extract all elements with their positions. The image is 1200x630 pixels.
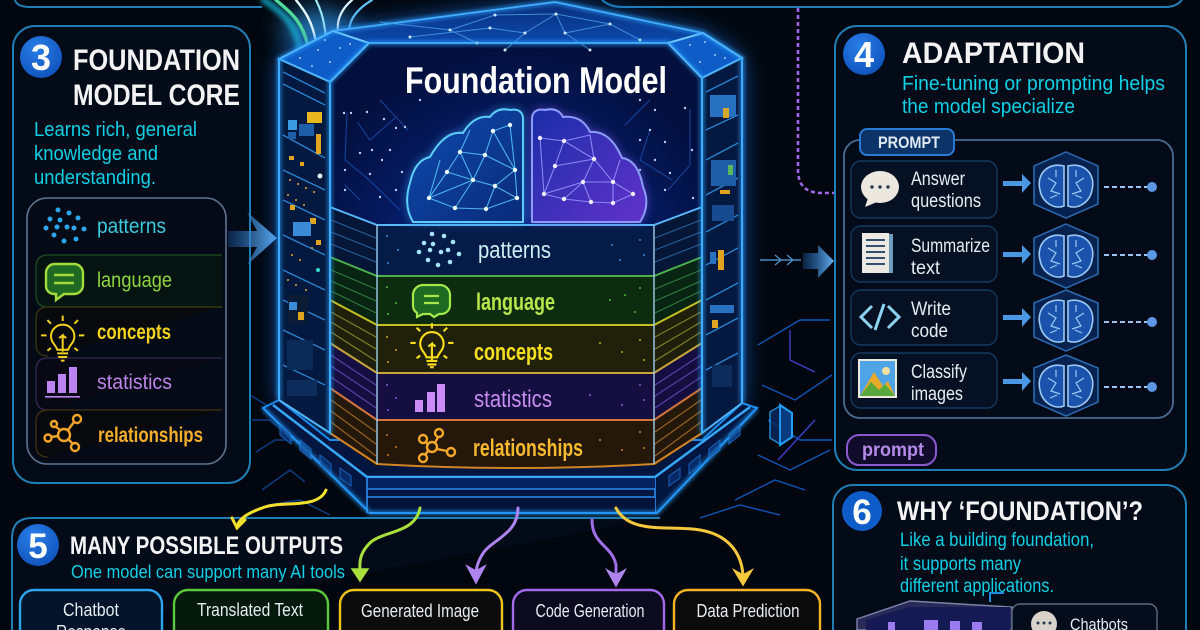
knowledge list bbox=[27, 198, 226, 464]
label: statistics: statistics bbox=[97, 371, 172, 394]
roof bbox=[333, 2, 703, 50]
description bbox=[900, 530, 1094, 597]
icon: network bbox=[44, 415, 81, 451]
left hemisphere bbox=[407, 109, 523, 222]
description: the model specialize bbox=[902, 96, 1075, 118]
icon: document bbox=[862, 233, 893, 273]
description: knowledge and bbox=[34, 143, 158, 165]
neural network lines bbox=[429, 125, 517, 209]
card: data prediction bbox=[674, 590, 820, 630]
specialized model hexagon 1 bbox=[1034, 152, 1098, 218]
icon: code bbox=[861, 304, 899, 330]
description: Like a building foundation, bbox=[900, 530, 1094, 551]
panel 4: adaptation bbox=[835, 26, 1186, 470]
description: different applications. bbox=[900, 576, 1054, 597]
card: chatbot response: Chatbot bbox=[63, 600, 119, 620]
arrow: purple right bbox=[592, 520, 625, 586]
small arrows bbox=[1003, 174, 1031, 391]
layer: language bbox=[413, 285, 555, 317]
glowing circuit chip bbox=[770, 405, 792, 445]
description: Fine-tuning or prompting helps bbox=[902, 73, 1165, 95]
badge 6 bbox=[842, 491, 882, 532]
purple dotted connector bbox=[798, 8, 843, 193]
arrow: list to core bbox=[228, 212, 277, 265]
layer: relationships bbox=[419, 429, 583, 462]
description: it supports many bbox=[900, 554, 1021, 575]
layer: statistics: statistics bbox=[474, 386, 552, 413]
heading: FOUNDATION bbox=[73, 44, 240, 77]
icon: chat bbox=[861, 171, 899, 207]
top-right panel edge bbox=[602, 0, 1182, 7]
circuit traces around the building bbox=[250, 320, 832, 518]
data streams entering the tower bbox=[264, 0, 372, 50]
panel 5: many possible outputs bbox=[12, 518, 820, 630]
card: data prediction: Data Prediction bbox=[696, 601, 800, 621]
card: translated text: Translated Text bbox=[197, 600, 303, 620]
row: write code bbox=[851, 290, 997, 345]
left tower bbox=[279, 31, 369, 433]
badge 5 bbox=[17, 524, 59, 566]
panel 3: foundation model core bbox=[13, 26, 250, 483]
icon: speech bubble bbox=[46, 264, 83, 300]
layer: relationships: relationships bbox=[473, 435, 583, 462]
applications box bbox=[1012, 604, 1157, 630]
layer: concepts bbox=[410, 323, 553, 367]
title: foundation model: Foundation Model bbox=[405, 60, 667, 101]
badge 4 bbox=[843, 33, 885, 75]
description: Learns rich, general bbox=[34, 119, 197, 141]
label: relationships: relationships bbox=[98, 424, 203, 447]
badge 4: 4 bbox=[854, 34, 874, 75]
foundation model building bbox=[263, 2, 757, 513]
specialized model hexagon 2 bbox=[1034, 224, 1098, 288]
row: answer questions: Answer bbox=[911, 169, 966, 190]
label: language: language bbox=[97, 269, 172, 292]
icon: bar chart bbox=[45, 367, 80, 398]
badge 5: 5 bbox=[28, 527, 48, 566]
badge 3: 3 bbox=[31, 37, 51, 78]
side strips and layers bbox=[330, 207, 702, 468]
row: classify images bbox=[851, 353, 997, 408]
card: code generation bbox=[513, 590, 664, 630]
building edge glow bbox=[263, 2, 757, 513]
row: write code: code bbox=[911, 321, 948, 342]
label: patterns: patterns bbox=[97, 215, 166, 238]
prompt pill bbox=[847, 435, 936, 465]
base plinth bbox=[263, 400, 757, 513]
top-left panel edge bbox=[15, 0, 262, 7]
row: answer questions bbox=[851, 161, 997, 218]
card: translated text bbox=[174, 590, 328, 630]
prompt tag bbox=[860, 129, 954, 155]
description bbox=[34, 119, 197, 189]
badge 6: 6 bbox=[852, 493, 872, 532]
layer: concepts: concepts bbox=[474, 339, 553, 366]
description: One model can support many AI tools bbox=[71, 562, 345, 582]
specialized model hexagon 4 bbox=[1034, 355, 1098, 416]
icon: patterns bbox=[46, 210, 84, 241]
row: answer questions: questions bbox=[911, 191, 981, 212]
heading: WHY ‘FOUNDATION’? bbox=[897, 496, 1143, 526]
icon: light bulb bbox=[41, 316, 84, 361]
arrow: green bbox=[352, 508, 420, 581]
badge 3 bbox=[20, 36, 62, 78]
description: understanding. bbox=[34, 167, 156, 189]
panel 6: why foundation bbox=[833, 485, 1186, 630]
heading: ADAPTATION bbox=[902, 37, 1085, 70]
description bbox=[902, 73, 1165, 118]
card: generated image: Generated Image bbox=[361, 601, 479, 621]
row: summarize text: text bbox=[911, 258, 941, 279]
building glow bbox=[279, 2, 742, 433]
row: summarize text bbox=[851, 226, 997, 282]
layer: language: language bbox=[476, 289, 555, 316]
right tower bbox=[668, 33, 742, 433]
brain bbox=[407, 109, 646, 222]
layer: statistics bbox=[415, 384, 552, 413]
row: write code: Write bbox=[911, 299, 951, 320]
label: concepts: concepts bbox=[97, 321, 171, 344]
task list frame bbox=[844, 140, 1173, 418]
icon: image bbox=[859, 360, 896, 397]
arrow: purple left bbox=[467, 508, 518, 583]
arrow: yellow bbox=[232, 490, 326, 528]
layer: patterns: patterns bbox=[478, 237, 551, 264]
layer: patterns bbox=[419, 234, 551, 265]
front face bbox=[330, 43, 702, 433]
prompt tag: PROMPT bbox=[878, 133, 941, 152]
card: generated image bbox=[340, 590, 502, 630]
arrow: core to adaptation bbox=[760, 245, 834, 278]
prompt pill: prompt bbox=[862, 440, 925, 461]
row: classify images: Classify bbox=[911, 362, 967, 383]
icon: chat bbox=[1031, 611, 1057, 630]
row: summarize text: Summarize bbox=[911, 236, 990, 257]
row: classify images: images bbox=[911, 384, 963, 405]
output dotted connectors bbox=[1104, 182, 1157, 392]
card: code generation: Code Generation bbox=[536, 601, 644, 621]
starfield circuit dots bbox=[344, 100, 693, 210]
arrow: orange bbox=[616, 508, 752, 585]
building illustration bbox=[857, 593, 1012, 630]
right hemisphere bbox=[532, 109, 646, 222]
heading bbox=[73, 44, 240, 112]
card: chatbot response bbox=[20, 590, 162, 630]
specialized model hexagon 3 bbox=[1034, 290, 1098, 351]
heading: MANY POSSIBLE OUTPUTS bbox=[70, 532, 343, 560]
heading: MODEL CORE bbox=[73, 79, 240, 112]
curved output arrows bbox=[232, 490, 752, 586]
